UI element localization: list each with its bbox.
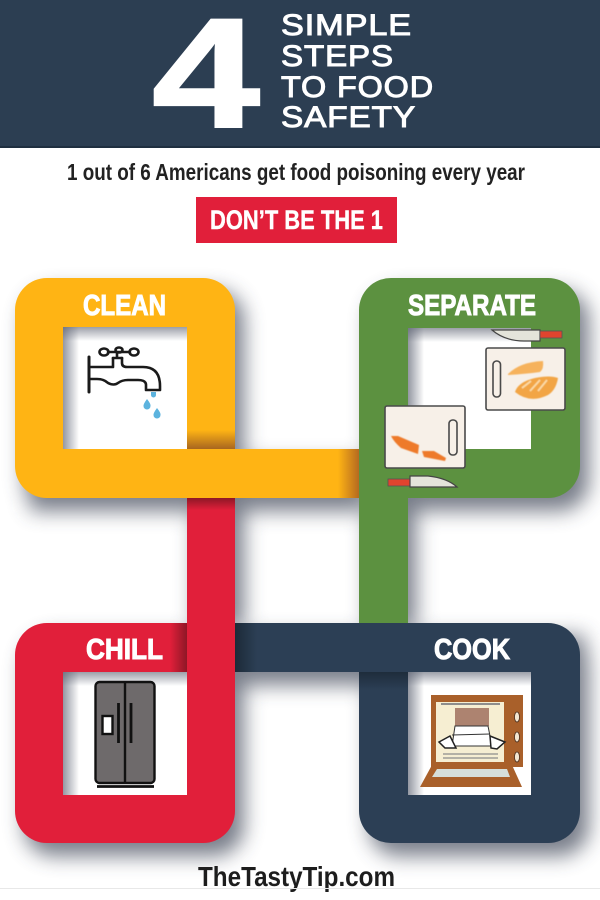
white hole fill — [63, 327, 531, 795]
label: clean: CLEAN — [83, 290, 166, 322]
title text: SIMPLE — [281, 9, 412, 42]
label: cook: COOK — [434, 634, 510, 666]
icon: water drops — [143, 392, 161, 419]
icon: oven — [420, 695, 523, 787]
title text: STEPS — [281, 40, 394, 73]
panel: clean frame — [15, 278, 359, 498]
icon: cutting board with carrot — [385, 406, 465, 468]
label: chill: CHILL — [86, 634, 163, 666]
callout: don't be the 1 — [196, 197, 397, 243]
footer site name: TheTastyTip.com — [198, 861, 395, 892]
drop shadows — [24, 290, 589, 856]
icon: faucet — [89, 348, 161, 419]
icon: cutting board with salmon — [486, 348, 565, 410]
title text: SAFETY — [281, 101, 416, 134]
icon: bottom knife — [388, 476, 457, 487]
panel: separate frame — [359, 278, 580, 623]
label: separate: SEPARATE — [408, 290, 536, 322]
title text: TO FOOD — [281, 71, 434, 104]
icon: top knife — [492, 330, 562, 341]
panel: chill frame — [15, 498, 235, 843]
header banner — [0, 0, 600, 161]
hole inner shadows — [63, 327, 531, 795]
callout: don't be the 1: DON’T BE THE 1 — [210, 205, 383, 235]
icon: refrigerator — [96, 682, 154, 786]
title text — [281, 9, 434, 134]
panel: cook frame — [235, 623, 580, 843]
